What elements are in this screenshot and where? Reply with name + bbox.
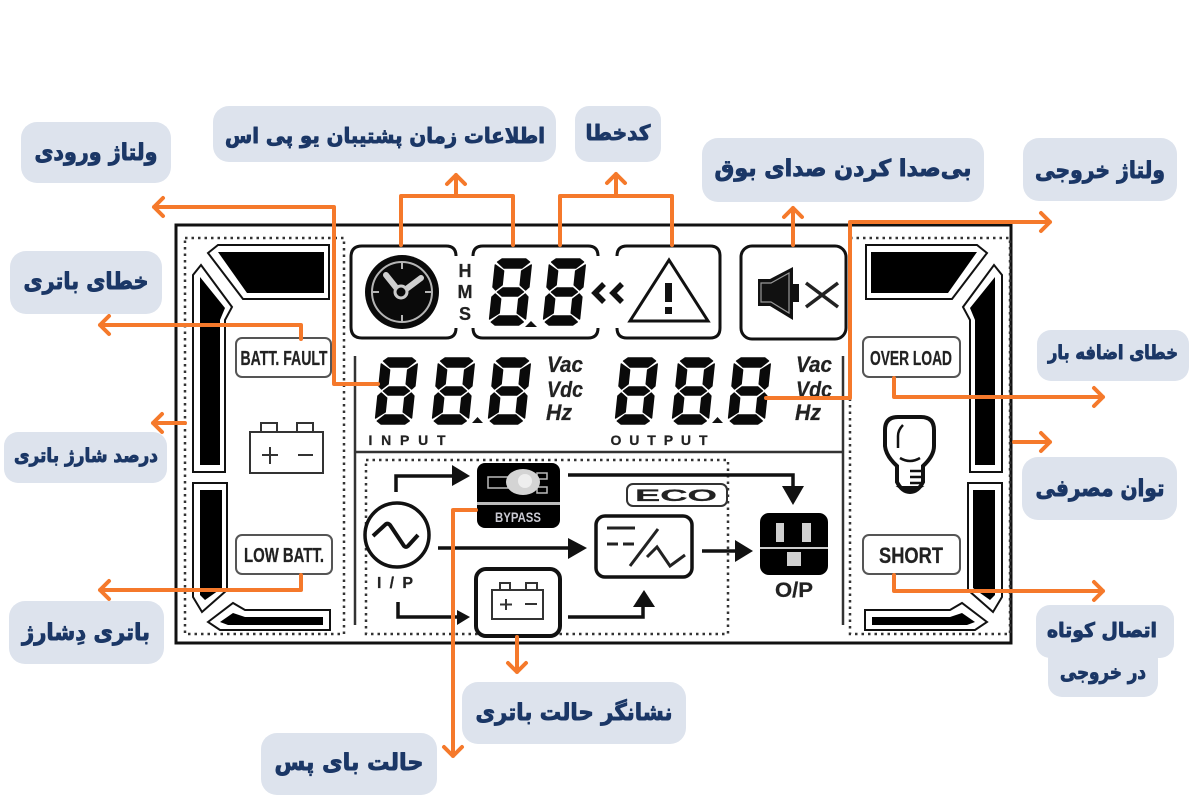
icon: mute box (741, 246, 846, 339)
label: output voltage (1023, 138, 1177, 201)
label: battery fault (10, 251, 162, 314)
input voltage digits (375, 358, 531, 424)
panel: LCD display (176, 225, 1011, 643)
arrow: short circuit (894, 575, 1103, 600)
arrow: mute (784, 208, 802, 245)
label: battery mode indicator: نشانگر حالت باتری (476, 699, 672, 726)
icon: bypass block: BYPASS (495, 509, 541, 525)
arrow: battery percent (153, 414, 185, 432)
label: battery mode indicator (462, 682, 686, 744)
icon: battery (250, 423, 323, 473)
input units: Hz (546, 400, 572, 425)
arrow: bypass to output (568, 475, 804, 505)
label: battery discharge (9, 601, 164, 664)
battery level bars left (193, 245, 330, 630)
icon: clock box (351, 246, 456, 338)
OVER LOAD badge: OVER LOAD (870, 348, 952, 370)
input units: Vac (547, 352, 583, 377)
label: output short circuit: اتصال کوتاه (1047, 618, 1157, 642)
arrow: input to bypass (396, 465, 470, 492)
arrow: load power (1014, 433, 1050, 451)
label: bypass mode (261, 733, 437, 795)
time and fault code digits (473, 246, 598, 338)
label: fault code (575, 106, 661, 162)
SHORT badge: SHORT (879, 543, 943, 568)
output voltage digits (615, 358, 771, 424)
arrow: overload (894, 378, 1103, 406)
arrow: input voltage (154, 198, 378, 384)
label: overload fault: خطای اضافه بار (1047, 342, 1178, 364)
label: mute beep: بی‌صدا کردن صدای بوق (714, 156, 972, 182)
BATT. FAULT badge: BATT. FAULT (240, 348, 328, 370)
output units: Hz (795, 400, 821, 425)
label: bypass mode: حالت بای پس (274, 750, 424, 776)
output units (795, 352, 832, 425)
label: battery discharge: باتری دِشارژ (21, 620, 150, 646)
label: battery charge percent: درصد شارژ باتری (14, 445, 158, 467)
arrow: low battery (100, 575, 301, 599)
arrow: bypass mode (444, 510, 476, 756)
icon: warning box (617, 246, 720, 338)
icon: bypass block (477, 463, 560, 528)
label: output short circuit (1036, 605, 1174, 697)
HMS labels (458, 261, 472, 324)
flow: input sine circle (365, 503, 429, 567)
chevrons (595, 284, 622, 302)
label: power consumption (1022, 457, 1177, 520)
arrow: battery fault (100, 316, 301, 339)
O/P label: O/P (775, 579, 813, 602)
HMS labels: M (458, 282, 472, 302)
HMS labels: S (459, 304, 471, 324)
LOW BATT. badge (236, 535, 332, 574)
label: output short circuit: در خروجی (1060, 660, 1146, 684)
HMS labels: H (458, 261, 472, 281)
label: power consumption: توان مصرفی (1036, 476, 1164, 502)
arrow: backup time (401, 175, 513, 245)
icon: inverter box (596, 516, 692, 577)
label: output voltage: ولتاژ خروجی (1035, 158, 1165, 184)
label: battery fault: خطای باتری (24, 269, 148, 295)
label: UPS backup time info (213, 106, 556, 162)
output units: Vdc (796, 377, 832, 402)
arrow: battery to inverter (568, 590, 655, 617)
label: input voltage (21, 122, 171, 183)
label: UPS backup time info: اطلاعات زمان پشتیبان یو پی اس (225, 124, 545, 148)
label: battery charge percent (4, 432, 167, 483)
icon: output socket (760, 513, 828, 575)
input units (546, 352, 583, 425)
OUTPUT label: OUTPUT (610, 432, 708, 448)
arrow: battery mode (508, 637, 526, 672)
LOW BATT. badge: LOW BATT. (244, 545, 324, 567)
label: mute beep (702, 138, 984, 202)
SHORT badge (863, 535, 960, 574)
arrow: input to inverter (438, 538, 587, 559)
ECO badge (627, 484, 727, 506)
icon: battery mode box (476, 569, 560, 636)
arrow: output voltage (766, 213, 1050, 398)
arrow: input to battery (398, 602, 470, 625)
ECO badge: ECO (635, 486, 717, 505)
label: input voltage: ولتاژ ورودی (34, 140, 158, 166)
output units: Vac (796, 352, 832, 377)
OVER LOAD badge (863, 337, 960, 377)
load level bars right (865, 245, 1002, 630)
icon: load bulb (885, 417, 934, 492)
arrow: fault code (560, 174, 672, 245)
input units: Vdc (547, 377, 583, 402)
label: fault code: کدخطا (586, 121, 651, 145)
INPUT label: INPUT (368, 432, 446, 448)
label: overload fault (1037, 330, 1189, 381)
I/P label: I/P (377, 575, 413, 592)
arrow: inverter to output (702, 540, 753, 562)
BATT. FAULT badge (236, 338, 331, 377)
